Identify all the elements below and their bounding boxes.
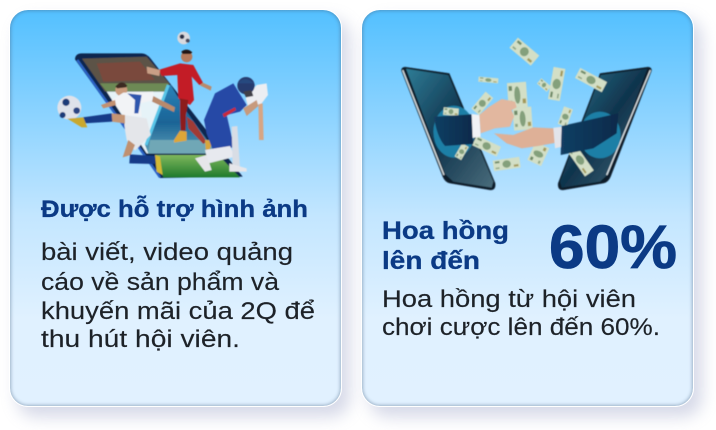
icon: phone body xyxy=(75,53,243,178)
heading: commission up to: lên đến xyxy=(382,247,480,275)
text block: commission description xyxy=(382,286,660,341)
icon: football high xyxy=(177,32,190,44)
heading: commission up to: Hoa hồng xyxy=(382,217,509,245)
panel: sports promotion card xyxy=(9,9,342,407)
icon: white kit footballer xyxy=(57,82,175,175)
icon: cricket batsman xyxy=(195,77,268,172)
illustration: phone with sports players xyxy=(57,32,268,178)
big number: 60 percent: 60% xyxy=(549,213,677,281)
text block: image support description: cáo về sản phẩm và xyxy=(41,269,280,296)
icon: flying banknotes xyxy=(443,38,607,176)
illustration: money passed between phones xyxy=(401,38,652,190)
text block: image support description: khuyến mãi của 2Q để xyxy=(41,298,315,325)
panel: commission card xyxy=(361,9,694,407)
text block: commission description: Hoa hồng từ hội viên xyxy=(382,286,636,313)
heading: commission up to xyxy=(382,217,509,275)
icon: left arm holding cash xyxy=(434,82,533,146)
text block: commission description: chơi cược lên đến 60%. xyxy=(382,314,660,341)
text block: image support description xyxy=(41,239,315,353)
text block: image support description: thu hút hội viên. xyxy=(41,326,240,353)
icon: red jersey player xyxy=(147,50,213,151)
icon: right phone xyxy=(558,67,652,190)
icon: left phone xyxy=(401,67,495,190)
icon: right arm receiving cash xyxy=(494,113,618,155)
heading: image support: Được hỗ trợ hình ảnh xyxy=(41,195,308,223)
text block: image support description: bài viết, video quảng xyxy=(41,239,293,266)
